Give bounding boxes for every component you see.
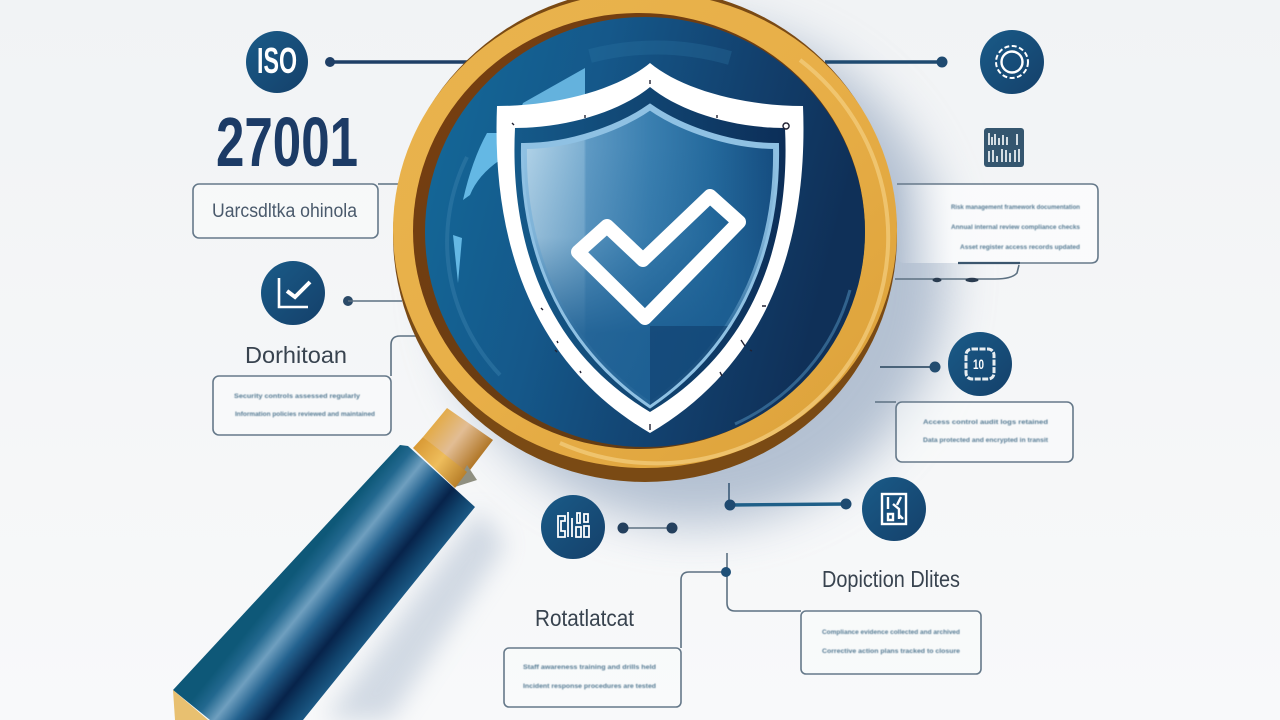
lens glass [425, 17, 865, 447]
text box: bottom left: Incident response procedures are tested [523, 683, 656, 690]
heading: bottom right section: Dopiction Dlites [822, 566, 960, 592]
text box: bottom right: Compliance evidence collected and archived [822, 629, 960, 636]
text box: bottom right: Corrective action plans tracked to closure [822, 648, 960, 655]
connector: lens to right bottom badge [724, 483, 852, 510]
heading: bottom left section: Rotatlatcat [535, 605, 635, 631]
text box: right middle: Data protected and encrypted in transit [923, 437, 1049, 444]
text box: upper right: Asset register access records updated [960, 244, 1080, 251]
text box: bottom right [801, 611, 981, 674]
shield [497, 63, 803, 433]
text box: left section: Information policies reviewed and maintained [235, 411, 375, 418]
text box: upper right: Risk management framework documentation [951, 204, 1080, 211]
text box: left section: Security controls assessed regularly [234, 393, 360, 400]
text box: standard label [193, 184, 400, 238]
magnifying glass [173, 0, 897, 720]
icon: left bottom badge [541, 495, 605, 559]
icon: document square [984, 128, 1024, 167]
check mark [578, 196, 739, 318]
handle [173, 408, 493, 720]
title: 27001: 27001 [216, 103, 358, 181]
text box: bottom left: Staff awareness training and drills held [523, 664, 656, 671]
connector: upper right box to lens [895, 265, 1019, 282]
badge: ISO: ISO [257, 40, 297, 81]
text box: bottom left [504, 648, 681, 707]
connector: checklist to lens [343, 296, 402, 306]
text box: right middle: Access control audit logs retained [923, 419, 1048, 426]
connector: chip badge to lens [880, 362, 940, 372]
connector: ring to lens [825, 56, 948, 68]
heading: left section: Dorhitoan [245, 342, 347, 368]
text box: right middle [875, 402, 1073, 462]
badge: ISO [246, 31, 308, 93]
connector: junction and branches [681, 553, 801, 648]
badge: chip: 10 [973, 356, 984, 372]
badge: target ring [980, 30, 1044, 94]
icon: checklist badge [261, 261, 325, 325]
text box: left section [213, 336, 418, 435]
icon: right bottom badge [862, 477, 926, 541]
badge: chip [948, 332, 1012, 396]
text box: upper right: Annual internal review compliance checks [951, 224, 1080, 231]
connector: ISO to lens [325, 57, 470, 67]
text box: standard label: Uarcsdltka ohinola [212, 201, 357, 222]
text box: upper right [897, 184, 1098, 263]
lens frame [393, 0, 897, 482]
connector: short dots [618, 522, 678, 534]
